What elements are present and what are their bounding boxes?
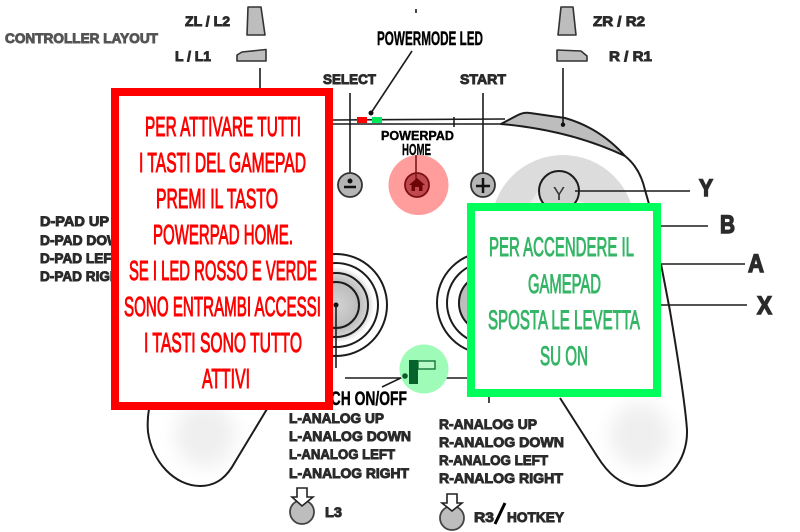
- labels: d-pad: D-PAD LEFT: [40, 250, 120, 266]
- labels: right analog: R-ANALOG LEFT: [439, 452, 548, 468]
- label: powermode LED: POWERMODE LED: [377, 29, 483, 50]
- label: START: START: [460, 71, 506, 87]
- LED indicators: [357, 117, 382, 123]
- labels: d-pad: D-PAD UP: [40, 213, 109, 229]
- label: SELECT: SELECT: [323, 71, 376, 87]
- panel: green instructions: PER ACCENDERE IL: [489, 232, 634, 262]
- left grip outline: [148, 409, 267, 486]
- panel: red instructions: POWERPAD HOME.: [153, 219, 293, 250]
- panel: red instructions: [115, 92, 329, 406]
- label: button B: B: [720, 211, 735, 239]
- label: powerpad home: [381, 128, 454, 159]
- labels: right analog: R-ANALOG UP: [439, 416, 537, 432]
- labels: d-pad: D-PAD DOWN: [40, 232, 130, 248]
- panel: green instructions: SU ON: [540, 341, 588, 371]
- panel: green instructions: GAMEPAD: [528, 269, 601, 299]
- right button cluster disc: [491, 155, 635, 299]
- labels: left analog: L-ANALOG UP: [289, 410, 384, 426]
- label: R3 / hotkey: [474, 503, 565, 525]
- top edge: [333, 117, 505, 127]
- label: ZR / R2: ZR / R2: [593, 13, 645, 29]
- panel: red instructions: PER ATTIVARE TUTTI: [145, 111, 301, 142]
- label: switch on/off: SWITCH ON/OFF: [296, 389, 407, 410]
- label: R3 / hotkey: HOTKEY: [507, 509, 565, 525]
- panel: green instructions: SPOSTA LE LEVETTA: [488, 305, 640, 335]
- panel: red instructions: SONO ENTRAMBI ACCESSI: [124, 291, 321, 322]
- label: R / R1: R / R1: [609, 48, 652, 64]
- labels: left analog: [289, 410, 411, 481]
- select button: [338, 173, 362, 197]
- grip shading: [175, 403, 235, 467]
- highlight: home button: [388, 155, 448, 215]
- labels: right analog: [439, 416, 564, 486]
- panel: red instructions: I TASTI SONO TUTTO: [144, 327, 302, 358]
- labels: right analog: R-ANALOG RIGHT: [439, 470, 563, 486]
- icon: R/R1 bumper: [557, 50, 587, 61]
- label: powerpad home: HOME: [402, 142, 431, 159]
- label: button X: X: [757, 292, 772, 320]
- labels: left analog: L-ANALOG LEFT: [289, 446, 395, 462]
- icon: ZL/L2 trigger: [247, 7, 265, 35]
- Y button: Y: [553, 184, 565, 204]
- start button: [471, 173, 495, 197]
- label: powerpad home: POWERPAD: [381, 128, 454, 143]
- controller body: [148, 113, 687, 486]
- label: L / L1: L / L1: [175, 48, 211, 64]
- panel: red instructions: I TASTI DEL GAMEPAD: [139, 147, 306, 178]
- panel: red instructions: SE I LED ROSSO E VERDE: [129, 255, 317, 286]
- label: R3 / hotkey: R3: [474, 509, 494, 525]
- right side outline: [560, 156, 687, 486]
- icon: L3 press: [290, 488, 314, 524]
- panel: green instructions: [471, 207, 657, 393]
- highlight: power switch: [400, 344, 448, 394]
- labels: d-pad: D-PAD RIGHT: [40, 268, 128, 284]
- icon: ZR/R2 trigger: [558, 7, 576, 35]
- labels: left analog: L-ANALOG RIGHT: [289, 465, 409, 481]
- labels: left analog: L-ANALOG DOWN: [289, 428, 411, 444]
- icon: L/L1 bumper: [237, 50, 266, 61]
- right shoulder: [501, 113, 625, 156]
- label: ZL / L2: ZL / L2: [185, 13, 230, 29]
- panel: red instructions: PREMI IL TASTO: [156, 183, 278, 214]
- label: button Y: Y: [699, 175, 713, 202]
- Y button: [539, 171, 579, 211]
- leader lines: [260, 9, 747, 403]
- icon: R3 press: [440, 494, 464, 530]
- left stick: [285, 254, 387, 368]
- label: L3: L3: [325, 504, 342, 520]
- labels: d-pad: [40, 213, 130, 284]
- panel: red instructions: ATTIVI: [202, 363, 250, 394]
- right stick: [437, 252, 539, 354]
- label: button A: A: [748, 250, 764, 278]
- labels: right analog: R-ANALOG DOWN: [439, 434, 564, 450]
- heading: controller layout: CONTROLLER LAYOUT: [5, 30, 158, 46]
- leader dots: [369, 110, 565, 127]
